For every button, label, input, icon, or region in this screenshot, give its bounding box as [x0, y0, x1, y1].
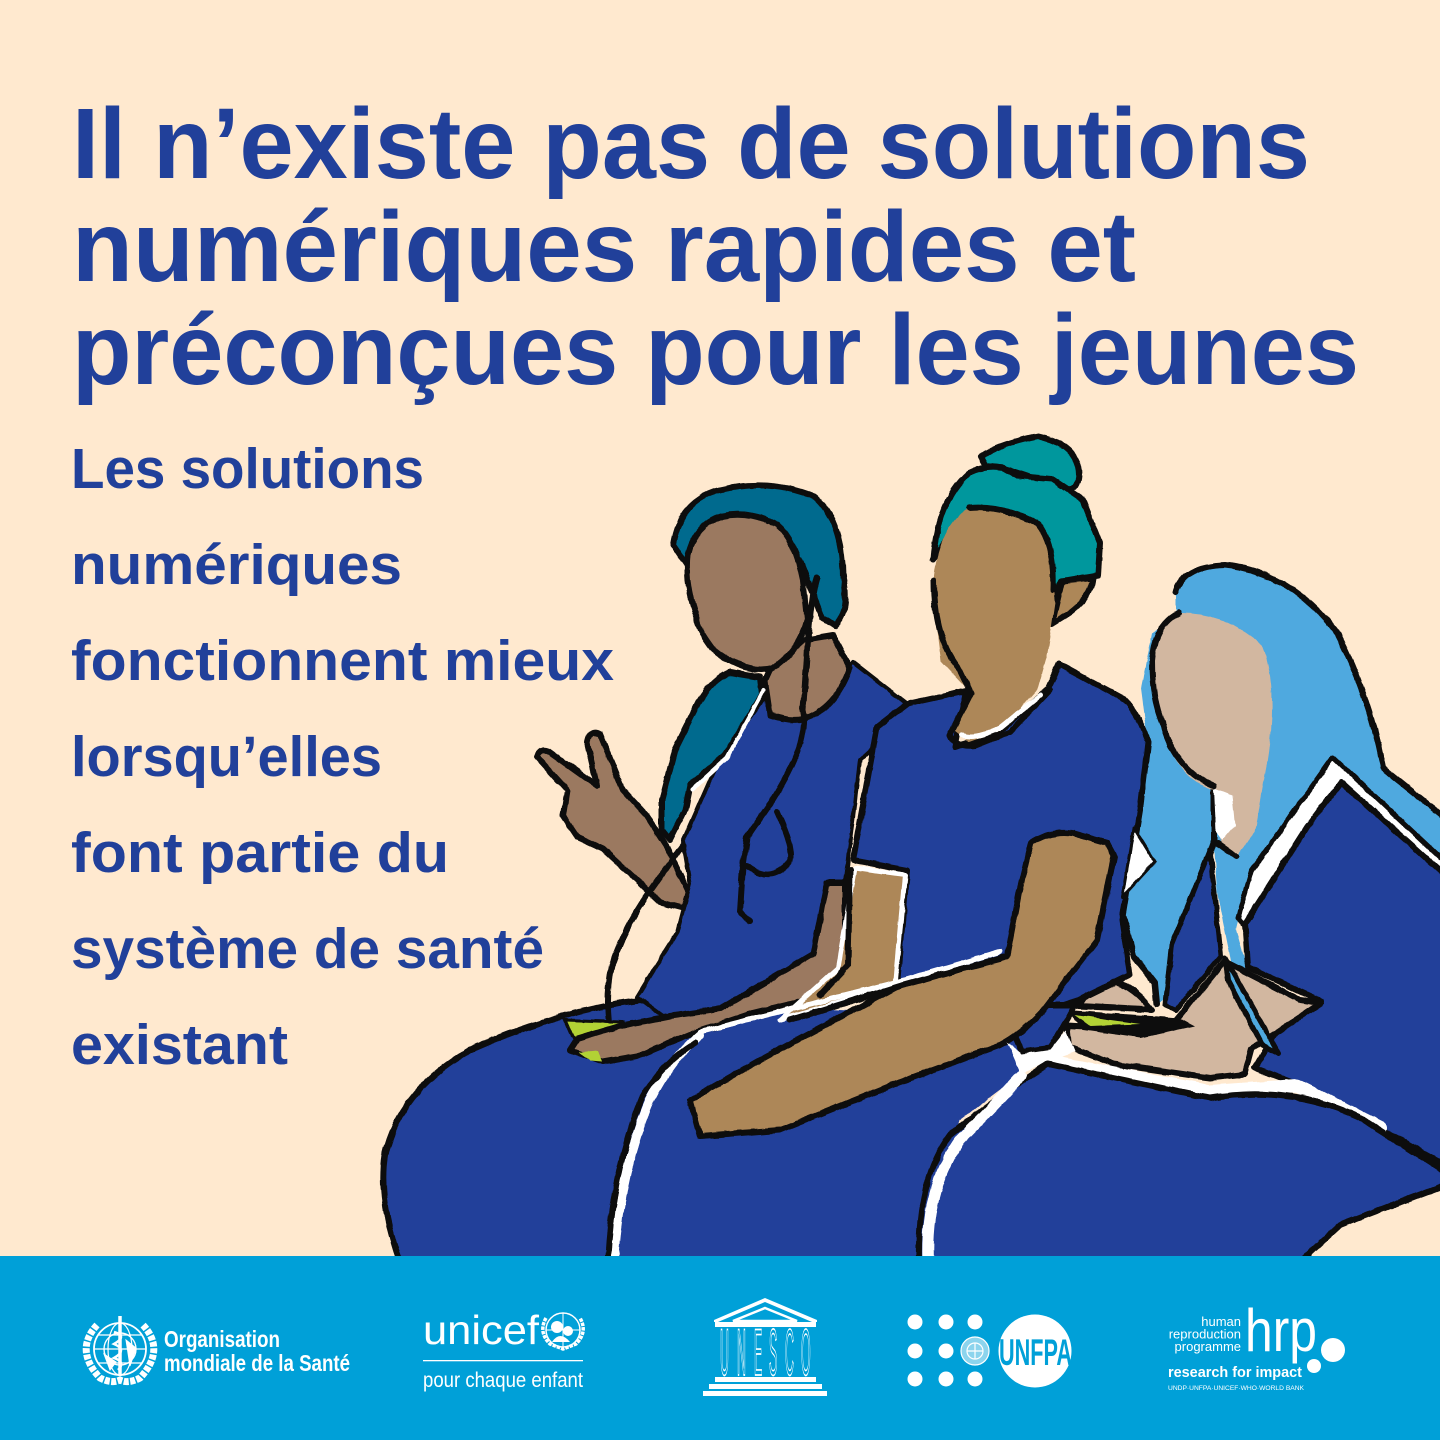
- title: Il n’existe pas de solutions: [72, 88, 1310, 200]
- torso: left woman: [637, 662, 915, 1016]
- body text: lorsqu’elles: [71, 725, 382, 789]
- raised thumb: right woman: [1079, 980, 1152, 1010]
- white outline on left of lap: [614, 1035, 700, 1262]
- body text: numériques: [71, 533, 402, 597]
- arc line of sleeve: [608, 845, 683, 1030]
- logo: UNFPA: UNFPA: [999, 1332, 1072, 1373]
- logo: HRP: human: [1201, 1314, 1241, 1329]
- phone: left woman: [565, 1020, 623, 1060]
- face and neck: right woman: [1152, 613, 1272, 854]
- hair bun: [981, 436, 1079, 490]
- logo: WHO: Organisation: [164, 1326, 280, 1352]
- white line on arm: [700, 952, 1000, 1032]
- earphone cable: [740, 578, 817, 921]
- phone: right woman: [1067, 1010, 1195, 1038]
- white beside ponytail: [692, 690, 764, 790]
- small blue fold under arm: [1015, 1005, 1075, 1052]
- figure: woman on the left: [383, 485, 915, 1262]
- lap: middle woman: [610, 1008, 1030, 1262]
- hair: right woman: [1124, 565, 1440, 1052]
- forearm and hand: left woman: [570, 883, 845, 1062]
- logo: HRP: reproduction: [1169, 1326, 1241, 1342]
- body text: système de santé: [71, 917, 544, 981]
- hair: left woman: [673, 485, 845, 626]
- figure: woman in the middle: [608, 436, 1155, 1262]
- title: numériques rapides et: [72, 191, 1136, 303]
- white under chin: [1214, 788, 1235, 840]
- earphone loop: [747, 811, 791, 875]
- logo: UNESCO: E: [754, 1317, 762, 1390]
- dots: [908, 1314, 982, 1386]
- logo: UNFPA: [908, 1314, 1072, 1388]
- lap: right woman: [919, 1062, 1440, 1262]
- title: [72, 88, 1359, 406]
- ear: middle woman: [1052, 578, 1093, 624]
- face and neck: middle woman: [934, 508, 1055, 742]
- logo: WHO: mondiale de la Santé: [164, 1350, 350, 1376]
- title: préconçues pour les jeunes: [72, 294, 1359, 406]
- front lock of hair: [1225, 958, 1279, 1054]
- logo: HRP: hrp: [1245, 1297, 1317, 1364]
- logo: HRP: [1168, 1297, 1345, 1392]
- white area beside hand: [1007, 1030, 1075, 1074]
- hair outline top: [1176, 565, 1440, 818]
- logo: UNESCO: S: [769, 1317, 777, 1390]
- icon: UNICEF emblem: [543, 1313, 583, 1349]
- hair outline inner: [1166, 790, 1214, 1000]
- torso: right woman: [1245, 782, 1440, 1165]
- illustration: three young women looking at phones: [383, 436, 1440, 1262]
- logo: UNESCO: O: [801, 1317, 811, 1390]
- figure: woman on the right: [1067, 565, 1440, 1165]
- body text: Les solutions: [71, 437, 424, 501]
- logo: HRP: UNDP·UNFPA·UNICEF·WHO·WORLD BANK: [1168, 1385, 1305, 1392]
- logo: UNICEF: pour chaque enfant: [423, 1369, 583, 1392]
- bent arm: middle woman: [690, 832, 1114, 1136]
- body text: font partie du: [71, 821, 449, 885]
- body text: [71, 437, 614, 1077]
- logo: HRP: programme: [1175, 1339, 1241, 1354]
- hair: middle woman: [933, 467, 1100, 600]
- logo: UNICEF: unicef: [423, 1307, 540, 1353]
- white band along lap edge: [928, 1076, 1021, 1262]
- logo: UNESCO: [703, 1298, 827, 1396]
- neck: left woman: [765, 635, 850, 720]
- logo: HRP: research for impact: [1168, 1365, 1302, 1381]
- torso gap: right woman: [1165, 850, 1221, 1010]
- face: left woman: [687, 514, 807, 669]
- raised hand: [537, 732, 690, 908]
- white wedge around torso: [1238, 757, 1440, 926]
- torso: middle woman: [853, 664, 1148, 1010]
- body text: fonctionnent mieux: [71, 629, 614, 693]
- arm and hand: right woman: [1067, 961, 1321, 1078]
- phone corner below finger: [578, 1050, 602, 1062]
- logo: UNESCO: C: [785, 1317, 794, 1390]
- logo: UNESCO: N: [737, 1317, 746, 1390]
- logo: UNICEF: [423, 1307, 583, 1392]
- footer band: [0, 1256, 1440, 1440]
- logo: WHO: [86, 1316, 350, 1382]
- hair outline lock: [1124, 918, 1157, 1004]
- body text: existant: [71, 1013, 288, 1077]
- far forearm: middle woman: [780, 868, 905, 1020]
- icon: WHO emblem: [86, 1316, 154, 1382]
- white notch in hair: [1122, 828, 1155, 898]
- logo: UNESCO: U: [720, 1317, 729, 1390]
- lap: left woman: [383, 1000, 720, 1262]
- icon: UN emblem: [961, 1337, 989, 1365]
- ponytail: [662, 672, 762, 840]
